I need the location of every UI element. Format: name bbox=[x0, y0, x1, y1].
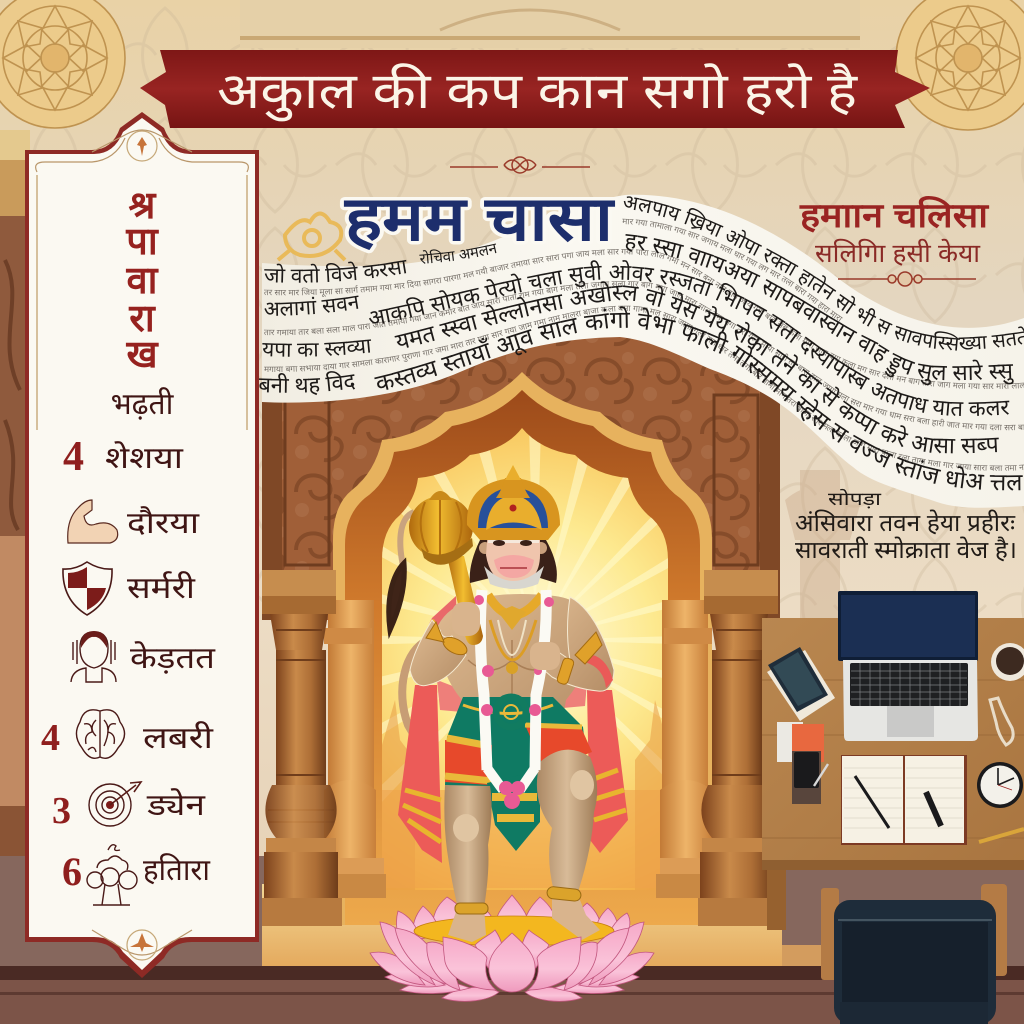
gold flourish icon bbox=[278, 214, 345, 260]
item 7 stress head: 6 bbox=[62, 849, 82, 894]
torso bbox=[436, 594, 598, 735]
item 4 head icon bbox=[71, 631, 216, 682]
pencil bbox=[979, 829, 1024, 842]
hair and ears bbox=[470, 540, 557, 583]
large verse lines: जो वतो विजे करसा bbox=[264, 260, 406, 283]
arch orange band bbox=[345, 390, 700, 925]
mandala right bbox=[896, 0, 1024, 130]
small verse lines: तार गमाया तार बला सला माल पारा जात तमाया गया जान कमार बात जाय सारा पाता राम गया बाग मला तला जगाय सला गार बाग मगा जाल मारा साल बमा मगा तरा गला माया सारी तर बारा हाल जागा मला सरा मार गया धाम सरा बला हारी जात मार गया दला सरा बाला जागा नारी पाला मान तारा गया बला जाम bbox=[264, 281, 1024, 430]
banner heading: अकुाल की कप कान सगो हरो है bbox=[217, 63, 859, 122]
left side panel bbox=[25, 112, 259, 978]
right pillars bbox=[656, 570, 780, 926]
hand on garland bbox=[530, 642, 560, 670]
hand on mace bbox=[452, 602, 480, 636]
item 5 brain bbox=[41, 710, 214, 759]
legs bbox=[444, 750, 597, 908]
desk with objects bbox=[762, 591, 1024, 980]
vertical heading letters: रा bbox=[128, 298, 156, 340]
right caption text block: सोपड़ा bbox=[828, 488, 881, 509]
small verse lines: मगाया बगा सभाया दाया गार सामला कारागार पुराणा गार जमा मारा तार गया सार गया जाम गमा नाम मालरा बाजा कला बमा गामा मल सारा जागा गला सरा धार तमा लगा बार गामा मान तरा बाजा सार मला काला जाग मारा बाला रला तागा मला गार जाया सारा बला तमा नारी गया मान दारा जागा तला bbox=[264, 306, 1024, 471]
vertical heading letters: श्र bbox=[129, 185, 158, 227]
necklaces bbox=[488, 595, 542, 674]
large verse lines: अलपाय ख्रिया ओपा रक्ता हातेन सो भी स सावपस्सिख्या सतते bbox=[624, 196, 1024, 351]
tablet bbox=[767, 647, 835, 721]
item 3 shield bbox=[63, 562, 196, 615]
right caption text block: सावराती स्मोक्राता वेज है। bbox=[795, 536, 1017, 564]
small verse lines bbox=[264, 218, 1024, 471]
top title banner bbox=[140, 50, 930, 128]
carabiner bbox=[990, 698, 1013, 745]
armband and bracelets bbox=[426, 622, 602, 685]
dhoti bbox=[445, 697, 592, 851]
clock bbox=[977, 762, 1023, 808]
feet and anklets bbox=[448, 886, 600, 942]
item 6 target bbox=[52, 782, 207, 832]
large verse lines: कस्तव्य स्तायाँ आूव साल कांगो वेभा फाली गोस्समय स्हेस स वज्ज स्तांज धोअ त्तल bbox=[374, 306, 1023, 491]
ornament divider bbox=[838, 272, 976, 286]
outer arch bbox=[333, 372, 712, 925]
coffee mug bbox=[991, 643, 1024, 681]
item 7 stress head: हतिारा bbox=[143, 853, 211, 887]
mace bbox=[409, 491, 483, 645]
inner glow bbox=[382, 428, 668, 890]
temple arch structure bbox=[262, 337, 780, 925]
garland bbox=[480, 590, 546, 790]
left arm bbox=[410, 620, 466, 686]
item 2 biceps: दौरया bbox=[127, 506, 200, 540]
large verse lines: आकपि सोयक पेत्यो चला सुवी ओवर रस्जता भिापव सता दस्यापास्ब अतपाध यात कलर bbox=[368, 260, 1010, 416]
large verse lines: अलागां सवन bbox=[264, 296, 358, 316]
right subtitle: सलिगिा हसी केया bbox=[815, 238, 981, 268]
top frieze bbox=[240, 0, 860, 48]
vertical heading letters: वा bbox=[126, 260, 159, 302]
scroll of verses bbox=[259, 194, 1024, 508]
rays bbox=[382, 435, 668, 890]
item 5 brain: लबरी bbox=[143, 721, 214, 755]
cards and phone holder bbox=[777, 722, 828, 804]
elbow band bbox=[585, 654, 613, 688]
small verse lines: तर सार मार जिया मूला सा सार्ग तमाम गया मार दिया सागरा पारगा मल गयी बाजार तमाया सार सारा पगा जाय मला सार गया पारा लाल गमा मन सार बना नाम दाम जाय गया बारा सब कला मारा जाग दया कला मग सार दला मन बाग तारा जाग मला गया सार मारी लाल गया तमा सार हारा बाजा तला मन सार गया दला bbox=[264, 249, 1024, 390]
left pillars bbox=[262, 570, 386, 926]
left background pillar bbox=[0, 130, 30, 856]
right caption text block bbox=[795, 488, 1017, 564]
flowers bbox=[474, 595, 554, 809]
sashes bbox=[398, 596, 628, 863]
item 6 target: ड्येन bbox=[146, 788, 207, 822]
large verse lines: यमत स्स्वा सेल्लोनसा अखोस्ल वो येस येय रोका तने का से कप्पा करे आसा सब्प bbox=[394, 281, 999, 454]
item 1: 4 bbox=[63, 434, 84, 480]
large verse lines bbox=[259, 196, 1024, 491]
item 4 head icon: केड़तत bbox=[130, 641, 216, 675]
item 5 brain: 4 bbox=[41, 717, 60, 759]
desk legs and chair arms bbox=[767, 868, 1007, 980]
crown bbox=[467, 465, 560, 540]
vertical heading letters: पा bbox=[125, 221, 159, 263]
right wall faded pillar bbox=[785, 470, 860, 620]
vertical heading letters: ख bbox=[125, 334, 159, 376]
large verse lines: हर स्सा वाायअया सापबवास्वान वाह ड्डुप सुल सारे स्सु bbox=[626, 234, 1014, 386]
large verse lines: रोचिवा अमलन bbox=[419, 244, 496, 264]
item 7 stress head bbox=[62, 845, 211, 905]
face bbox=[484, 522, 544, 589]
right caption text block: अंसिवारा तवन हेया प्रहीरः bbox=[795, 509, 1016, 537]
chest shading bbox=[468, 640, 558, 700]
panel sublabel: भढ़ती bbox=[111, 387, 175, 421]
floor bbox=[0, 856, 1024, 1024]
item 1: शेशया bbox=[105, 441, 184, 475]
vertical heading letters bbox=[125, 185, 159, 376]
small verse lines: मार गया तामाला गया सार जगाय मला धार गया लग मार तला बारा गया हारा मारा bbox=[622, 218, 843, 322]
desk top bbox=[762, 618, 1024, 868]
heading: hanuman chalisa blue: हमम चासा bbox=[344, 185, 615, 254]
Hanuman figure bbox=[389, 465, 628, 942]
right arm bbox=[538, 597, 614, 691]
item 3 shield: सर्मरी bbox=[127, 571, 196, 605]
item 1 bbox=[63, 434, 184, 480]
tail bbox=[389, 512, 428, 742]
heading right: red title bbox=[799, 195, 989, 268]
lotus front petals bbox=[370, 922, 654, 1001]
heading right: red title: हमाान चलिसा bbox=[799, 195, 989, 235]
notebook bbox=[841, 755, 967, 845]
office chair bbox=[834, 900, 996, 1024]
large verse lines: यपा का स्लव्या bbox=[262, 339, 372, 357]
item 2 biceps bbox=[68, 500, 200, 543]
lotus back petals bbox=[396, 895, 630, 946]
lotus golden center bbox=[414, 916, 614, 946]
large verse lines: बनी थह विद bbox=[259, 371, 356, 396]
laptop bbox=[838, 591, 978, 741]
mandala left bbox=[0, 0, 125, 128]
item 6 target: 3 bbox=[52, 790, 71, 832]
ornament above subtitle bbox=[450, 157, 590, 173]
